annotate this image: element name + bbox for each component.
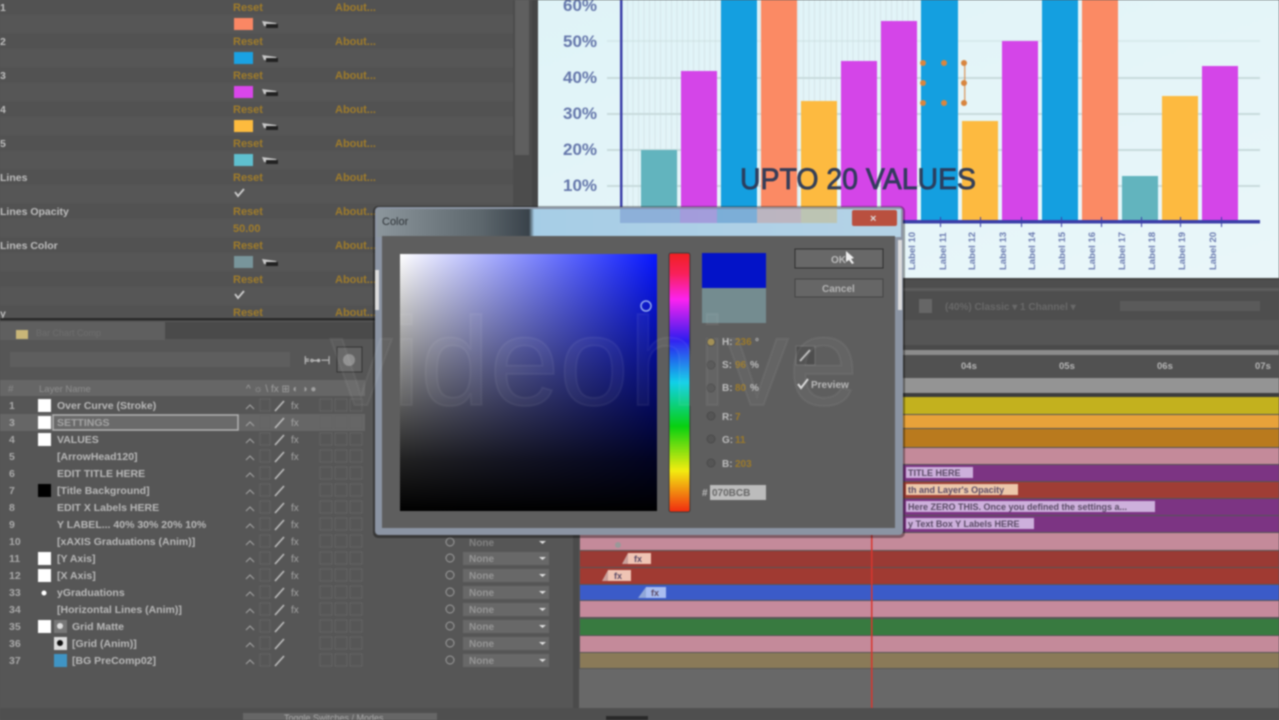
fx switches: fx — [291, 401, 299, 412]
layer list: 11 — [9, 553, 20, 565]
layer list: 4 — [9, 434, 15, 446]
parent dropdowns: None — [469, 639, 494, 650]
x axis labels: Label 19 — [1177, 232, 1188, 270]
swatch: lines colour — [234, 256, 253, 268]
layer list: [Grid (Anim)] — [72, 638, 137, 650]
fx switches: fx — [291, 503, 299, 514]
layer list: Y LABEL... 40% 30% 20% 10% — [57, 519, 207, 531]
layer list: SETTINGS — [57, 417, 110, 429]
colour value fields: % — [750, 383, 759, 394]
x axis labels: Label 11 — [938, 232, 949, 270]
layer list: 36 — [9, 638, 21, 650]
chart axes — [620, 0, 1260, 227]
panel: effect controls: 4 — [0, 104, 6, 116]
colour value fields: % — [750, 360, 759, 371]
layer header: Layer Name — [39, 384, 91, 395]
panel: effect controls: Reset — [233, 2, 263, 14]
parent dropdowns: None — [469, 588, 494, 599]
hex input — [702, 485, 766, 500]
layer list: EDIT TITLE HERE — [57, 468, 145, 480]
colour value fields: 203 — [735, 459, 752, 470]
panel: effect controls: Lines — [0, 172, 28, 184]
layer list: [Title Background] — [57, 485, 150, 497]
x axis labels: Label 13 — [998, 232, 1009, 270]
dialog title bar — [377, 208, 901, 237]
preview checkbox — [798, 379, 849, 391]
panel: timeline layers — [0, 318, 575, 720]
panel: effect controls: Reset — [233, 240, 263, 252]
parent dropdowns — [446, 538, 549, 667]
parent dropdowns: None — [469, 656, 494, 667]
layer list: Grid Matte — [72, 621, 124, 633]
layer bar tags: TITLE HERE — [908, 468, 961, 478]
panel: effect controls: 1 — [0, 2, 6, 14]
x axis labels: Label 15 — [1057, 231, 1068, 270]
fx switches: fx — [291, 588, 299, 599]
parent dropdowns: None — [469, 571, 494, 582]
panel: effect controls — [0, 0, 532, 320]
layer list: [Y Axis] — [57, 553, 96, 565]
layer list: [ArrowHead120] — [57, 451, 138, 463]
panel: effect controls: About... — [335, 206, 376, 218]
layer list: 1 — [9, 400, 15, 412]
x axis labels: Label 12 — [967, 232, 978, 270]
time ruler labels: 04s — [961, 361, 977, 372]
layer header: # — [8, 384, 14, 395]
fx switches: fx — [291, 605, 299, 616]
x axis labels — [907, 231, 1219, 270]
icons: checkboxes — [235, 189, 244, 298]
parent dropdowns: None — [469, 605, 494, 616]
panel: effect controls: Reset — [233, 70, 263, 82]
layer bar tags: th and Layer's Opacity — [908, 485, 1004, 495]
layer bar tags: Here ZERO THIS. Once you defined the settings a... — [908, 502, 1127, 512]
fx switches — [291, 401, 299, 616]
layer list: 9 — [9, 519, 15, 531]
layer switches — [246, 399, 362, 666]
panel: effect controls: About... — [335, 104, 376, 116]
y axis labels: 30% — [563, 104, 597, 123]
colour picker dialog — [330, 206, 905, 538]
colour value fields: R: — [722, 412, 733, 423]
layer list: 35 — [9, 621, 21, 633]
layer list: 10 — [9, 536, 21, 548]
layer list: yGraduations — [57, 587, 125, 599]
selection handles — [920, 60, 967, 106]
parent dropdowns: None — [469, 554, 494, 565]
fx switches: fx — [291, 537, 299, 548]
time ruler labels: 06s — [1157, 361, 1173, 372]
eyedropper button — [796, 346, 815, 365]
panel: effect controls: About... — [335, 172, 376, 184]
x axis labels: Label 20 — [1208, 232, 1219, 270]
search bar — [10, 347, 362, 372]
colour preview swatch — [702, 253, 766, 323]
selected layer row — [0, 414, 365, 431]
panel: effect controls: Reset — [233, 36, 263, 48]
layer list: [Horizontal Lines (Anim)] — [57, 604, 182, 616]
colour value fields: 80 — [735, 383, 747, 394]
layer header — [0, 380, 365, 396]
colour value fields — [707, 337, 759, 470]
colour value fields: 96 — [735, 360, 747, 371]
layer bar tags: fx — [614, 571, 622, 581]
colour value fields: 236 — [735, 337, 752, 348]
colour value fields: B: — [722, 459, 733, 470]
panel: effect controls: Lines Color — [0, 240, 58, 252]
preview toolbar — [532, 280, 1279, 320]
panel: effect controls: Reset — [233, 104, 263, 116]
swatch: bar colour 4 — [234, 120, 253, 132]
layer bar tags: fx — [651, 588, 659, 598]
OK button: OK — [831, 255, 847, 266]
panel: effect controls: 5 — [0, 138, 6, 150]
OK button — [795, 249, 883, 268]
swatch: bar colour 2 — [234, 52, 253, 64]
layer bar tags: y Text Box Y Labels HERE — [908, 519, 1020, 529]
watermark: videohive — [330, 293, 858, 432]
fx switches: fx — [291, 452, 299, 463]
layer colour icons — [38, 399, 67, 667]
panel: timeline — [573, 320, 1279, 720]
layer list: 3 — [9, 417, 15, 429]
playhead — [871, 530, 872, 710]
colour value fields: S: — [722, 360, 732, 371]
layer header: ^ ☼ \ fx ⊞ ◐ ◑ ● — [246, 384, 316, 395]
colour value fields: 11 — [735, 435, 746, 446]
close button: × — [870, 213, 876, 225]
fx switches: fx — [291, 554, 299, 565]
fx switches: fx — [291, 418, 299, 429]
colour value fields: 7 — [735, 412, 741, 423]
close button — [852, 210, 897, 226]
panel: effect controls: About... — [335, 307, 376, 319]
parent dropdowns: None — [469, 538, 494, 549]
time ruler labels: 05s — [1059, 361, 1075, 372]
layer list: [BG PreComp02] — [72, 655, 156, 667]
layer list: [xAXIS Graduations (Anim)] — [57, 536, 195, 548]
panel: effect controls: Reset — [233, 274, 263, 286]
bar chart — [641, 0, 1238, 222]
Cancel button — [795, 279, 883, 297]
colour value fields: B: — [722, 383, 733, 394]
search bar: ⊧⊶⊣ — [304, 355, 330, 367]
parent dropdowns: None — [469, 622, 494, 633]
x axis labels: Label 17 — [1117, 232, 1128, 270]
panel: effect controls: Reset — [233, 138, 263, 150]
panel: effect controls: About... — [335, 138, 376, 150]
panel: effect controls: 50.00 — [233, 223, 261, 235]
layer list — [9, 400, 207, 667]
layer bar tags — [602, 467, 1155, 598]
y axis labels: 20% — [563, 140, 597, 159]
panel: effect controls: Reset — [233, 307, 263, 319]
fx switches: fx — [291, 520, 299, 531]
time ruler labels: 07s — [1255, 361, 1271, 372]
panel: effect controls: 3 — [0, 70, 6, 82]
icons: eyedroppers — [262, 21, 278, 266]
x axis labels: Label 10 — [907, 232, 918, 270]
panel: effect controls: About... — [335, 240, 376, 252]
layer list: 7 — [9, 485, 15, 497]
panel: effect controls: About... — [335, 2, 376, 14]
panel: effect controls: About... — [335, 274, 376, 286]
layer list: Over Curve (Stroke) — [57, 400, 156, 412]
panel: effect controls: About... — [335, 36, 376, 48]
panel: effect controls: y — [0, 308, 6, 320]
swatch: bar colour 3 — [234, 86, 253, 98]
swatch: bar colour 5 — [234, 154, 253, 166]
layer list: 33 — [9, 587, 21, 599]
fx switches: fx — [291, 435, 299, 446]
x axis labels: Label 18 — [1147, 232, 1158, 270]
layer list: 5 — [9, 451, 15, 463]
y axis labels: 10% — [563, 176, 597, 195]
panel: effect controls: About... — [335, 70, 376, 82]
fx switches: fx — [291, 571, 299, 582]
y axis labels: 50% — [563, 32, 597, 51]
preview toolbar: (40%) Classic ▾ 1 Channel ▾ — [945, 302, 1077, 313]
layer list: EDIT X Labels HERE — [57, 502, 159, 514]
colour value fields: G: — [722, 435, 733, 446]
timeline layer bars — [580, 397, 1279, 668]
colour value fields: ° — [755, 337, 759, 348]
hue slider — [669, 253, 690, 512]
layer list: 6 — [9, 468, 15, 480]
y axis labels — [563, 0, 597, 195]
layer bar tags: fx — [634, 554, 642, 564]
panel: effect controls: 2 — [0, 36, 6, 48]
layer list: 37 — [9, 655, 21, 667]
dialog edge highlights — [375, 240, 902, 310]
layer list: 8 — [9, 502, 15, 514]
panel: chart preview — [532, 0, 1279, 280]
timeline tab: Bar Chart Comp — [36, 328, 101, 338]
layer list: 12 — [9, 570, 21, 582]
chart title: UPTO 20 VALUES — [740, 163, 976, 196]
panel: effect controls: Reset — [233, 172, 263, 184]
panel: effect controls: Reset — [233, 206, 263, 218]
bottom status bar — [0, 708, 1279, 720]
hex input: # — [702, 488, 708, 499]
colour field — [400, 254, 657, 511]
colour value fields: H: — [722, 337, 733, 348]
hex input: 070BCB — [712, 488, 750, 499]
timeline tab — [0, 322, 535, 340]
grid lines — [607, 41, 1260, 186]
layer list: VALUES — [57, 434, 99, 446]
swatch: bar colour 1 — [234, 18, 253, 30]
x axis labels: Label 16 — [1087, 232, 1098, 270]
preview checkbox: Preview — [811, 380, 849, 391]
dialog title bar: Color — [382, 216, 409, 228]
layer list: [X Axis] — [57, 570, 96, 582]
layer list: 34 — [9, 604, 21, 616]
panel: effect controls: Lines Opacity — [0, 206, 69, 218]
Cancel button: Cancel — [822, 284, 855, 295]
y axis labels: 40% — [563, 68, 597, 87]
time ruler labels — [961, 361, 1271, 372]
x axis labels: Label 14 — [1027, 231, 1038, 270]
